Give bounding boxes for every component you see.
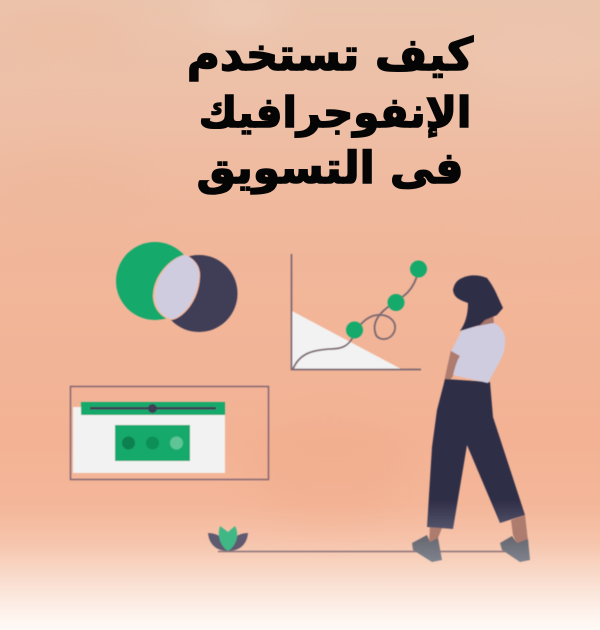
woman figure xyxy=(412,275,530,562)
arm xyxy=(444,350,461,386)
data points xyxy=(346,260,427,338)
chart area triangle xyxy=(292,311,403,370)
slider xyxy=(90,407,216,410)
trousers xyxy=(427,379,525,529)
shirt xyxy=(451,323,505,383)
title line 3: فى التسويق xyxy=(197,143,463,194)
chart xyxy=(292,254,427,370)
icon: plant xyxy=(208,526,248,551)
web page card xyxy=(70,386,268,480)
frame xyxy=(70,386,268,480)
venn diagram xyxy=(116,242,238,332)
title line 2: الإنفوجرافيك xyxy=(199,88,471,137)
top bar xyxy=(81,402,225,415)
neck xyxy=(478,312,494,328)
page body xyxy=(73,407,225,473)
green circle xyxy=(116,242,194,320)
shoes xyxy=(412,535,442,562)
button group xyxy=(115,425,190,461)
dark circle xyxy=(160,255,238,332)
title line 1: كيف تستخدم xyxy=(187,28,473,81)
overlap xyxy=(153,254,200,320)
hair xyxy=(453,275,503,331)
axes xyxy=(292,254,421,370)
title xyxy=(187,28,474,195)
ground line xyxy=(218,550,510,552)
leg skin xyxy=(429,526,442,543)
trend line xyxy=(293,272,418,369)
